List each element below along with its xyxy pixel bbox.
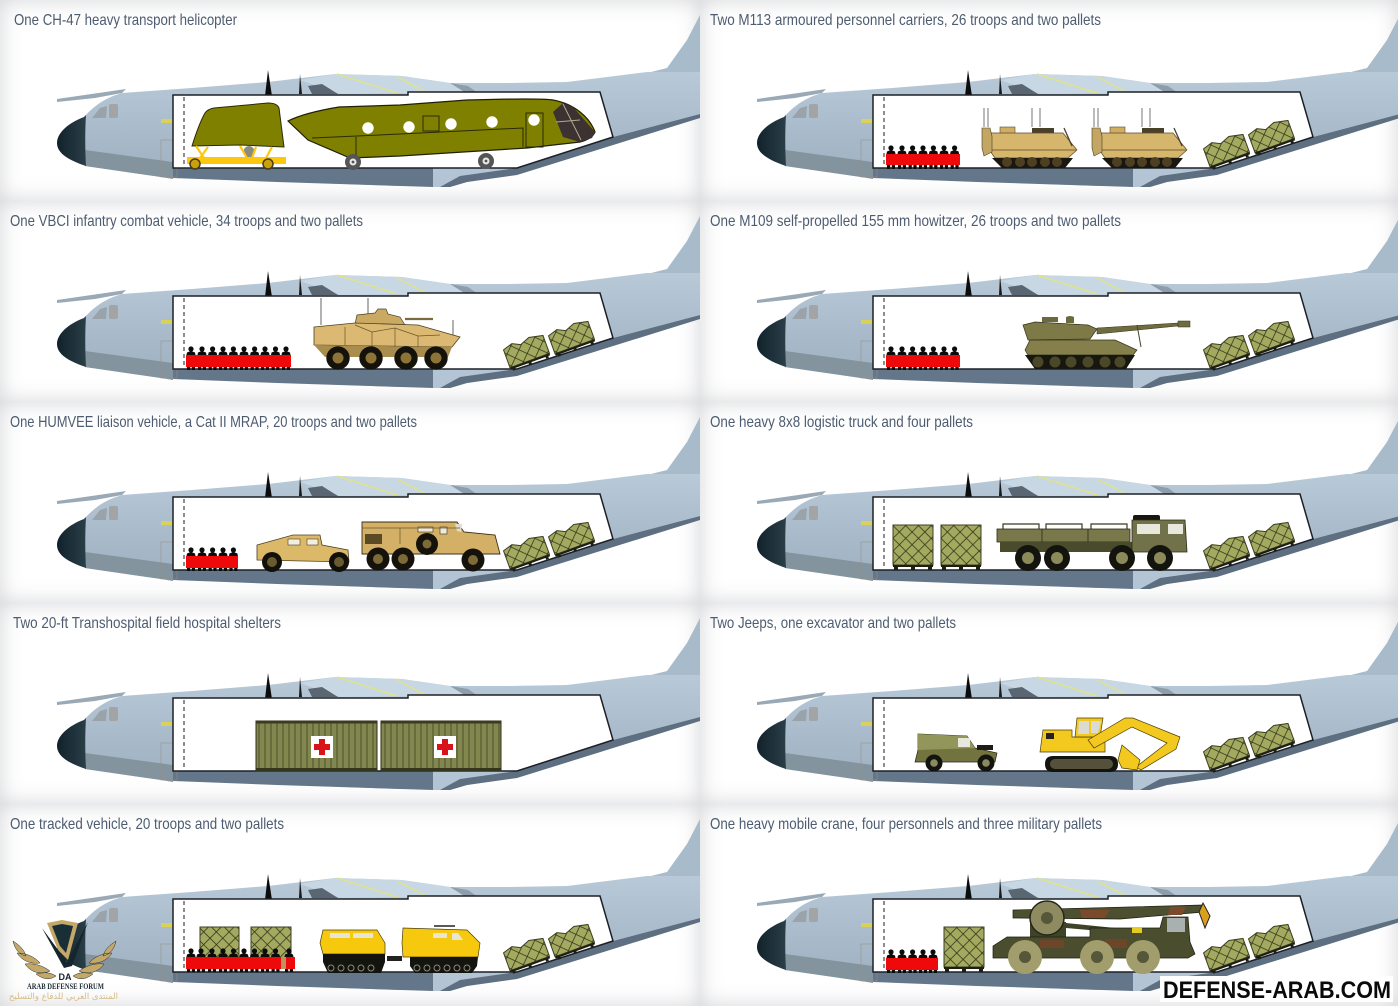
aircraft cutaway: [57, 15, 700, 187]
watermark: Arab Defense Forum logo: المنتدى العربي للدفاع والتسليح: [9, 992, 118, 1002]
aircraft cutaway: [57, 618, 700, 790]
pallets: [502, 520, 596, 572]
pallets: [1202, 319, 1296, 371]
panel: two M113: [700, 0, 1398, 201]
panel: CH-47 helicopter: [0, 0, 700, 201]
troops: [886, 346, 960, 370]
pallets: [502, 922, 596, 974]
heading: tracked vehicle: One tracked vehicle, 20 troops and two pallets: [10, 816, 284, 833]
M113 carrier 2: [1092, 108, 1187, 168]
heading: Jeeps: Two Jeeps, one excavator and two pallets: [710, 615, 956, 632]
heading: HUMVEE: One HUMVEE liaison vehicle, a Cat II MRAP, 20 troops and two pallets: [10, 414, 417, 431]
aircraft cutaway: [757, 819, 1398, 991]
aircraft cutaway: [757, 216, 1398, 388]
watermark: Arab Defense Forum logo: DA: [58, 972, 72, 982]
HUMVEE: [257, 535, 349, 572]
flat pallet: [944, 927, 984, 972]
troops: [186, 547, 238, 571]
pallets: [502, 319, 596, 371]
watermark: Arab Defense Forum logo: [9, 920, 118, 1002]
shelter 2: [381, 721, 501, 772]
flat pallet 2: [941, 525, 981, 570]
troops: [186, 346, 291, 370]
panel: M109: [700, 201, 1398, 402]
heading: CH-47: One CH-47 heavy transport helicopter: [14, 12, 238, 29]
pallets: [1202, 922, 1296, 974]
panel: tracked vehicle: [0, 804, 700, 1006]
pallets: [1202, 520, 1296, 572]
aircraft cutaway: [757, 618, 1398, 790]
heading: shelters: Two 20-ft Transhospital field hospital shelters: [13, 615, 281, 632]
M113 carrier 1: [982, 108, 1077, 168]
troops: [186, 948, 295, 972]
rotor pack on yellow trolley: [187, 103, 286, 169]
aircraft cutaway: [757, 15, 1398, 187]
jeep: [915, 734, 997, 772]
panel: 8x8 truck: [700, 402, 1398, 603]
panel: Jeeps and excavator: [700, 603, 1398, 804]
heading: M109: One M109 self-propelled 155 mm howitzer, 26 troops and two pallets: [710, 213, 1121, 230]
panel: mobile crane: [700, 804, 1398, 1006]
MRAP: [362, 522, 500, 572]
8x8 logistic truck: [997, 515, 1187, 571]
M109 howitzer: [1023, 316, 1190, 369]
personnel: [886, 949, 938, 973]
flat pallet 1: [893, 525, 933, 570]
CH-47 fuselage: [288, 99, 595, 170]
excavator: [1040, 718, 1180, 772]
aircraft cutaway: [757, 417, 1398, 589]
pallets on troops: [200, 927, 291, 959]
aircraft cutaway: [57, 216, 700, 388]
mobile crane: [993, 901, 1210, 974]
panel: HUMVEE and MRAP: [0, 402, 700, 603]
shelter 1: [256, 721, 377, 772]
heading: VBCI: One VBCI infantry combat vehicle, 34 troops and two pallets: [10, 213, 363, 230]
heading: M113: Two M113 armoured personnel carriers, 26 troops and two pallets: [710, 12, 1101, 29]
tracked vehicle: [320, 926, 480, 973]
pallets: [1202, 118, 1296, 170]
watermark: Arab Defense Forum logo: ARAB DEFENSE FORUM: [27, 982, 104, 991]
pallets: [1202, 721, 1296, 773]
heading: truck: One heavy 8x8 logistic truck and four pallets: [710, 414, 973, 431]
aircraft cutaway: [57, 417, 700, 589]
VBCI vehicle: [314, 298, 460, 370]
troops: [886, 145, 960, 169]
panel: VBCI: [0, 201, 700, 402]
panel: hospital shelters: [0, 603, 700, 804]
aircraft cutaway: [57, 819, 700, 991]
heading: crane: One heavy mobile crane, four personnels and three military pallets: [710, 816, 1102, 833]
